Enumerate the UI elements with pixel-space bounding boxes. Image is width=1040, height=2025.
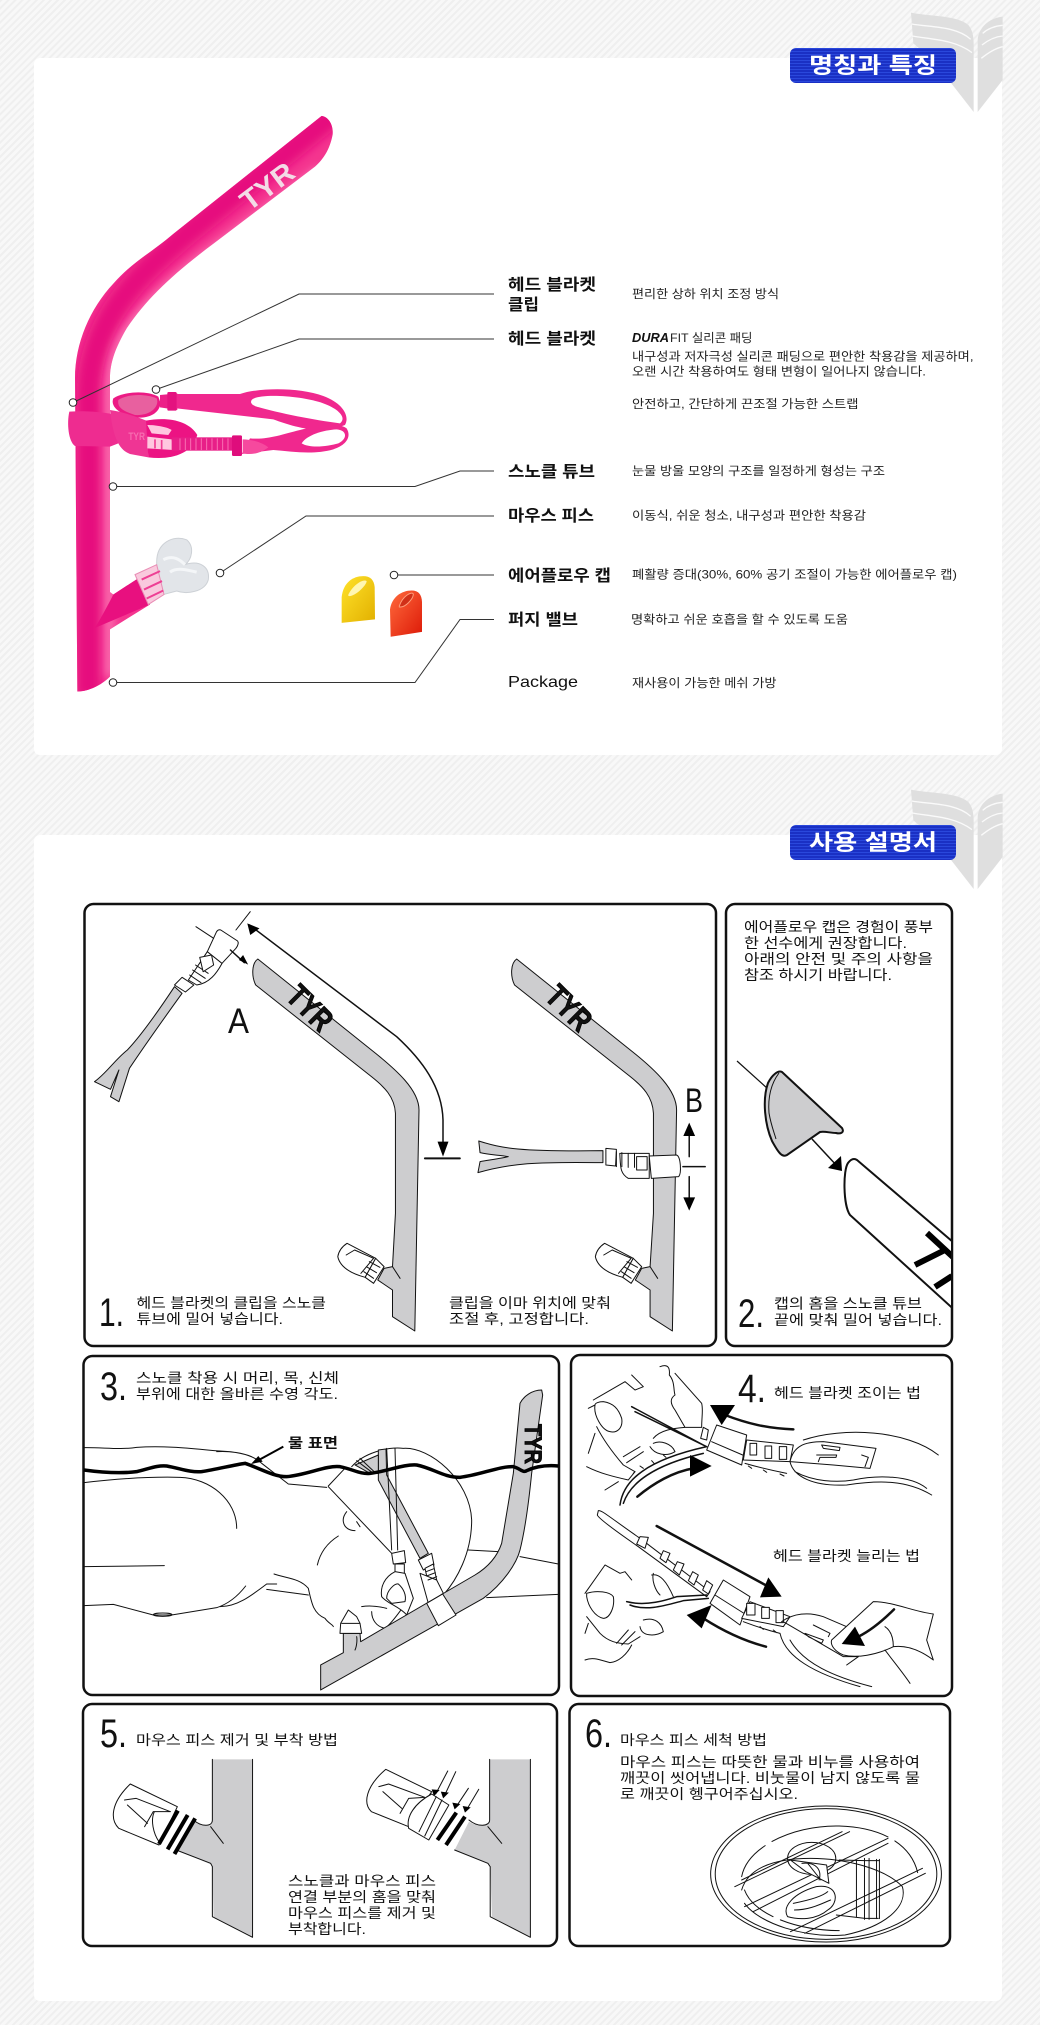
step 6 body text: [620, 1754, 920, 1802]
arrows lower: [657, 1526, 773, 1589]
clip band: [427, 1594, 456, 1626]
step 2 text: 끝에 맞춰 밀어 넣습니다.: [774, 1312, 942, 1328]
step 6 body text: 깨끗이 씻어냅니다. 비눗물이 남지 않도록 물: [620, 1770, 920, 1786]
step 5 drawing: [113, 1759, 530, 1937]
part labels: 헤드 블라켓: [508, 330, 596, 348]
strap on head: [378, 1449, 428, 1558]
step 5 body text: 부착합니다.: [288, 1921, 366, 1937]
step 1 text right: 조절 후, 고정합니다.: [449, 1311, 589, 1327]
left tube: [176, 1759, 253, 1937]
step 6 drawing: case with mouthpiece: [711, 1806, 941, 1942]
part labels: 에어플로우 캡: [508, 567, 611, 585]
step 2 panel: [726, 904, 960, 1346]
part labels: 클립: [508, 296, 539, 314]
step 2 drawing: cap and tube: [737, 1061, 960, 1315]
part descriptions: [631, 287, 974, 690]
mouthpiece: [340, 1610, 362, 1633]
step number 5: 5.: [100, 1712, 127, 1756]
step 1 text right: 클립을 이마 위치에 맞춰: [449, 1295, 611, 1311]
part descriptions: 편리한 상하 위치 조정 방식: [632, 287, 779, 301]
leader line: purge valve: [109, 620, 494, 686]
arrows upper: [725, 1415, 793, 1429]
logo: TYR right: TYR: [539, 977, 600, 1038]
heading badge: user manual: 사용 설명서: [809, 830, 937, 855]
icon: bookmark emblem: [911, 790, 1003, 889]
step number 3: 3.: [100, 1365, 127, 1409]
step 1 text left: [136, 1295, 326, 1327]
step 2 intro text: 한 선수에게 권장합니다.: [744, 935, 907, 951]
step 3 text: 부위에 대한 올바른 수영 각도.: [136, 1386, 338, 1402]
part labels: 헤드 블라켓: [508, 276, 596, 294]
buckle upper: [707, 1425, 747, 1465]
part descriptions: DURA: [632, 331, 669, 345]
step 3 text: 스노클 착용 시 머리, 목, 신체: [136, 1370, 339, 1386]
illustration: head bracket and strap: [68, 389, 349, 458]
leader line: snorkel tube: [109, 471, 494, 490]
heading badge: parts and features: 명칭과 특징: [809, 53, 937, 78]
step number 6: 6.: [585, 1712, 612, 1756]
label A: A: [228, 1002, 250, 1041]
step 1 drawing: [95, 912, 705, 1331]
step 6 heading text: 마우스 피스 세척 방법: [620, 1732, 767, 1748]
goggle lower: [780, 1614, 872, 1687]
leader line: mouthpiece: [216, 516, 494, 577]
right mouthpiece: [595, 1243, 642, 1283]
mouth branch: [95, 577, 150, 628]
right tube: [455, 1759, 530, 1937]
icon: bookmark emblem: [911, 13, 1003, 112]
step number 1: 1.: [99, 1291, 124, 1335]
step 2 intro text: 에어플로우 캡은 경험이 풍부: [744, 919, 933, 935]
step 1 text right: [449, 1295, 611, 1327]
hands upper: [587, 1366, 702, 1490]
part descriptions: 이동식, 쉬운 청소, 내구성과 편안한 착용감: [632, 508, 866, 522]
illustration: head bracket and strap: TYR: [128, 431, 145, 443]
step number 2: 2.: [738, 1292, 764, 1336]
step 2 intro text: 아래의 안전 및 주의 사항을: [744, 951, 933, 967]
part descriptions: 재사용이 가능한 메쉬 가방: [632, 676, 776, 690]
illustration: mouthpiece: [135, 538, 209, 604]
step 6 body text: 마우스 피스는 따뜻한 물과 비누를 사용하여: [620, 1754, 920, 1770]
step 2 text: [774, 1296, 942, 1328]
heading badge: parts and features: [790, 48, 956, 83]
part descriptions: 폐활량 증대(30%, 60% 공기 조절이 가능한 에어플로우 캡): [632, 568, 957, 582]
swimmer body lines: [84, 1447, 360, 1627]
heading badge: user manual: [790, 825, 956, 860]
left mouthpiece: [113, 1784, 177, 1845]
hands lower: [585, 1565, 673, 1663]
buckle lower: [710, 1580, 750, 1625]
step 4 panel: [571, 1355, 952, 1696]
right mouthpiece: [367, 1769, 432, 1827]
thumb right: [831, 1602, 933, 1660]
step 4 text: tighten: 헤드 블라켓 조이는 법: [774, 1385, 921, 1401]
label B: B: [685, 1082, 703, 1120]
left snorkel tube: [253, 959, 419, 1331]
step 3 text: [136, 1370, 339, 1402]
snorkel tube: [321, 1390, 543, 1690]
part labels: [508, 276, 611, 691]
step 2 intro text: [744, 919, 933, 983]
step 6 body text: 로 깨끗이 헹구어주십시오.: [620, 1786, 798, 1802]
illustration: yellow airflow cap: [342, 576, 375, 623]
step 5 panel: [83, 1704, 557, 1946]
logo: TYR on tube: TYR: [234, 156, 301, 217]
step 6 panel: [570, 1704, 950, 1946]
right snorkel tube: [512, 959, 677, 1331]
panel: parts and features: [34, 13, 1003, 755]
step 4 drawing: tighten: [585, 1366, 938, 1687]
buckles: [392, 1551, 406, 1564]
step 5 body text: [288, 1873, 436, 1937]
part labels: 퍼지 밸브: [508, 611, 578, 629]
part descriptions: FIT 실리콘 패딩: [670, 331, 752, 345]
strap end lower: [597, 1511, 710, 1597]
part descriptions: 오랜 시간 착용하여도 형태 변형이 일어나지 않습니다.: [632, 364, 926, 378]
step number 4: 4.: [738, 1367, 766, 1411]
leader line: head bracket clip: [69, 294, 494, 406]
step 1 text left: 튜브에 밀어 넣습니다.: [136, 1311, 283, 1327]
step 3 drawing: swimmer: [84, 1390, 558, 1690]
step 5 body text: 스노클과 마우스 피스: [288, 1873, 436, 1889]
arrow to water surface: [260, 1447, 283, 1459]
goggle upper: [790, 1442, 876, 1468]
leader line: airflow cap: [390, 571, 494, 579]
part descriptions: 안전하고, 간단하게 끈조절 가능한 스트랩: [632, 397, 858, 411]
leader line: head bracket: [152, 339, 494, 393]
step 5 heading text: 마우스 피스 제거 및 부착 방법: [136, 1732, 338, 1748]
part labels: 마우스 피스: [508, 507, 594, 525]
part descriptions: 내구성과 저자극성 실리콘 패딩으로 편안한 착용감을 제공하며,: [632, 350, 974, 364]
water surface label: 물 표면: [288, 1435, 338, 1451]
part labels: Package: [508, 674, 578, 691]
arrow A: [230, 925, 443, 1152]
logo: TYR left: TYR: [280, 977, 341, 1038]
step 5 body text: 마우스 피스를 제거 및: [288, 1905, 436, 1921]
right head bracket: [478, 1141, 680, 1178]
arrow B: [683, 1133, 705, 1200]
illustration: red airflow cap: [390, 591, 422, 637]
part descriptions: 눈물 방울 모양의 구조를 일정하게 형성는 구조: [632, 464, 885, 478]
step 1 text left: 헤드 블라켓의 클립을 스노클: [136, 1295, 326, 1311]
left head bracket: [95, 930, 238, 1102]
illustration: pink snorkel tube: [67, 100, 340, 701]
head and hair: [328, 1448, 558, 1628]
small arrows: [436, 1771, 479, 1811]
step 5 body text: 연결 부분의 홈을 맞춰: [288, 1889, 436, 1905]
logo: TYR step 3: TYR: [519, 1424, 546, 1464]
step 1 panel: [84, 904, 716, 1346]
part descriptions: 명확하고 쉬운 호흡을 할 수 있도록 도움: [631, 612, 848, 626]
step 2 intro text: 참조 하시기 바랍니다.: [744, 967, 892, 983]
left mouthpiece: [338, 1243, 384, 1283]
step 4 text: loosen: 헤드 블라켓 늘리는 법: [773, 1548, 920, 1564]
water surface: [84, 1463, 558, 1477]
panel: user manual: [34, 790, 1003, 2001]
part labels: 스노클 튜브: [508, 464, 595, 481]
step 3 panel: [84, 1356, 559, 1695]
step 2 text: 캡의 홈을 스노클 튜브: [774, 1296, 922, 1312]
